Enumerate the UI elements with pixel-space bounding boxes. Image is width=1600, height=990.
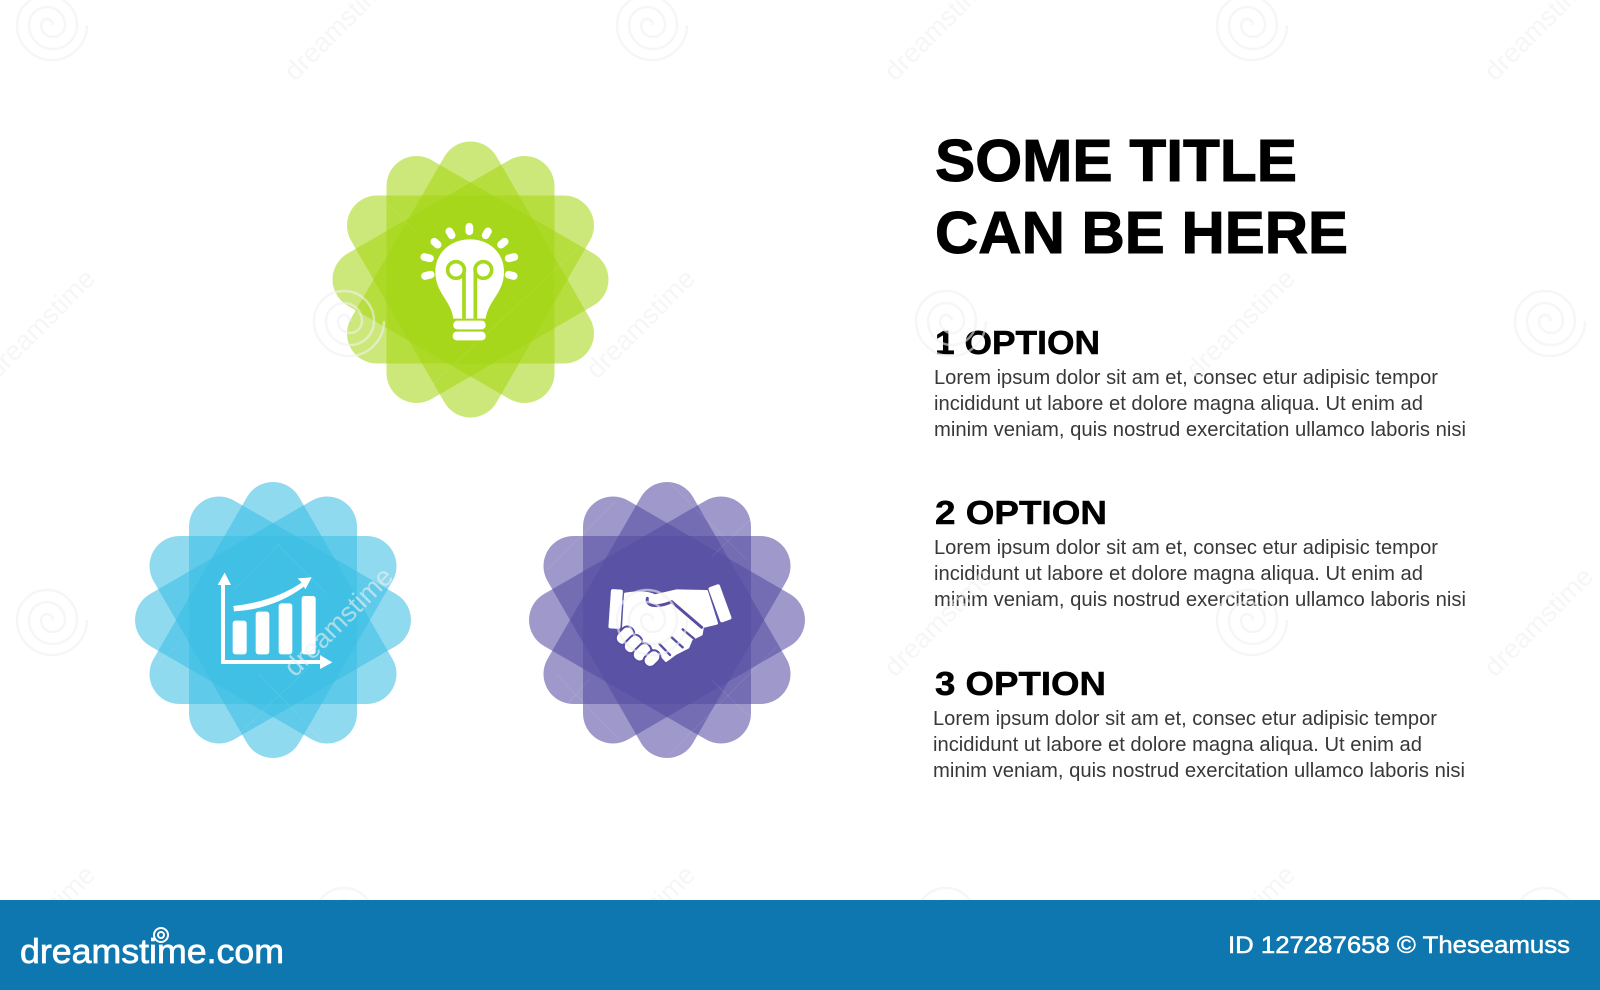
option 2 body <box>934 537 1466 611</box>
option 1 body: Lorem ipsum dolor sit am et, consec etur adipisic tempor <box>934 367 1438 389</box>
title: SOME TITLE <box>935 128 1297 194</box>
option 3 body: minim veniam, quis nostrud exercitation ullamco laboris nisi <box>933 760 1465 782</box>
watermark pattern: dreamstime <box>278 561 399 682</box>
option 1 body <box>934 367 1466 441</box>
image id and credit: ID 127287658 © Theseamuss <box>1228 932 1570 959</box>
watermark pattern: dreamstime <box>878 561 999 682</box>
option 2 heading: 2 OPTION <box>935 494 1107 531</box>
shape: purple badge <box>529 482 805 758</box>
watermark pattern: dreamstime <box>580 263 701 384</box>
option 2 body: minim veniam, quis nostrud exercitation ullamco laboris nisi <box>934 589 1466 611</box>
icon: handshake <box>608 584 732 670</box>
option 2 body: incididunt ut labore et dolore magna aliqua. Ut enim ad <box>934 563 1423 585</box>
option 3 body: incididunt ut labore et dolore magna aliqua. Ut enim ad <box>933 734 1422 756</box>
icon: light bulb <box>424 227 514 340</box>
logo: dreamstime.com: dreamstime.com <box>20 933 284 971</box>
option 3 <box>933 665 1465 782</box>
watermark pattern: dreamstime <box>1180 263 1301 384</box>
watermark pattern: dreamstime <box>580 859 701 980</box>
shape: blue badge <box>135 482 411 758</box>
shape: green badge <box>333 142 608 417</box>
title: CAN BE HERE <box>935 200 1348 266</box>
option 2 body: Lorem ipsum dolor sit am et, consec etur adipisic tempor <box>934 537 1438 559</box>
footer band <box>0 900 1600 990</box>
option 1 <box>934 324 1466 441</box>
watermark pattern: dreamstime <box>1180 859 1301 980</box>
icon: growth chart <box>218 573 332 669</box>
option 3 body: Lorem ipsum dolor sit am et, consec etur adipisic tempor <box>933 708 1437 730</box>
option 1 body: minim veniam, quis nostrud exercitation ullamco laboris nisi <box>934 419 1466 441</box>
option 1 heading: 1 OPTION <box>935 324 1100 361</box>
option 3 heading: 3 OPTION <box>935 665 1106 702</box>
option 3 body <box>933 708 1465 782</box>
option 1 body: incididunt ut labore et dolore magna aliqua. Ut enim ad <box>934 393 1423 415</box>
option 2 <box>934 494 1466 611</box>
watermark pattern: dreamstime <box>1478 561 1599 682</box>
title <box>935 128 1348 266</box>
